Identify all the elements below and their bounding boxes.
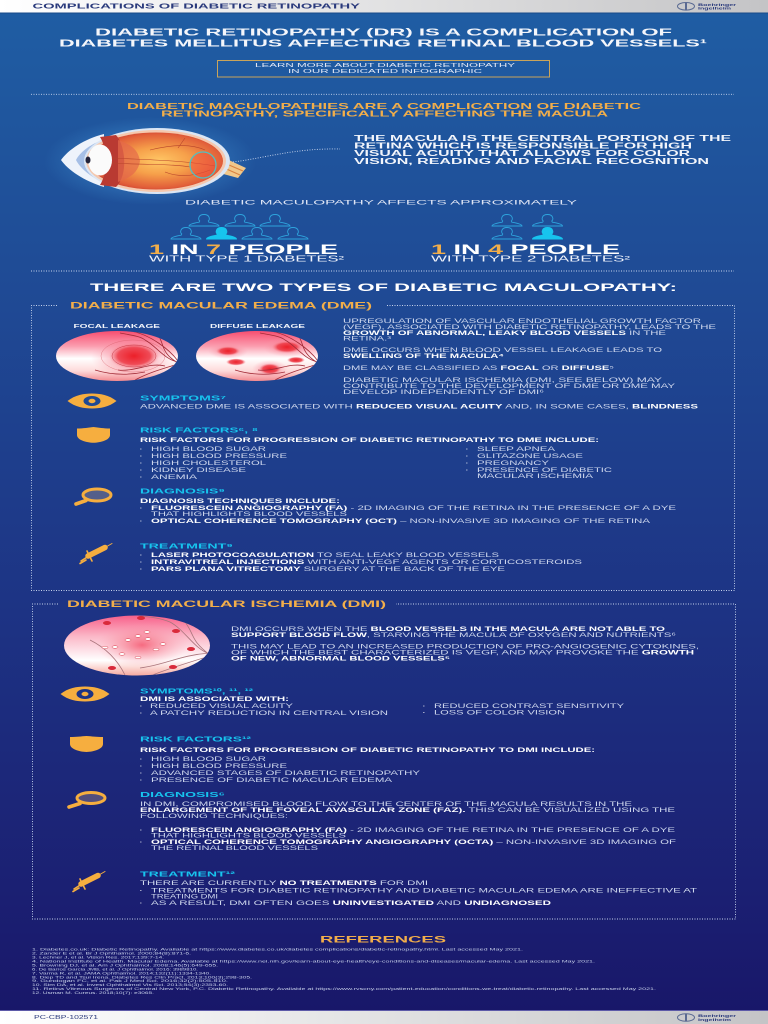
ciliary body xyxy=(100,135,124,187)
references list: 6. De Barros Garcia JMB, et al. J Ophthalmol. 2016: 3989810. xyxy=(32,967,198,971)
references list: 12. Usman M. Cureus. 2018;10(7): e3065. xyxy=(32,991,154,995)
DMI description: DMI OCCURS WHEN THE BLOOD VESSELS IN THE MACULA ARE NOT ABLE TO xyxy=(231,626,665,633)
DME description xyxy=(343,318,716,396)
panel: diabetic macular ischemia xyxy=(32,599,736,919)
diagnosis: · xyxy=(140,827,142,834)
link box: LEARN MORE ABOUT DIABETIC RETINOPATHY xyxy=(255,63,515,69)
DME description: (VEGF), ASSOCIATED WITH DIABETIC RETINOPATHY, LEADS TO THE xyxy=(343,324,716,331)
macula ring xyxy=(190,152,216,178)
icon: shield xyxy=(70,736,103,752)
stat: 1 in 7: 1 IN 7 PEOPLE xyxy=(149,242,338,257)
treatment: · xyxy=(140,552,142,559)
bullet list: right: PREGNANCY xyxy=(477,460,549,467)
diagnosis: FOLLOWING TECHNIQUES: xyxy=(140,813,288,820)
symptoms xyxy=(140,686,624,717)
DMI description xyxy=(231,626,700,663)
macula description: THE MACULA IS THE CENTRAL PORTION OF THE xyxy=(354,134,732,143)
gold subtitle xyxy=(127,102,641,119)
icon: people 1 in 4 xyxy=(492,214,562,239)
treatment: · xyxy=(140,900,142,907)
treatment: TREATMENT⁹ xyxy=(140,542,233,551)
stat: 1 in 4: WITH TYPE 2 DIABETES² xyxy=(431,254,631,264)
symptoms: SYMPTOMS¹⁰, ¹¹, ¹² xyxy=(140,686,254,695)
bullet list: right: · xyxy=(466,460,468,467)
risk factors: PRESENCE OF DIABETIC MACULAR EDEMA xyxy=(151,777,394,784)
DMI description: OF NEW, ABNORMAL BLOOD VESSELS⁵ xyxy=(231,656,450,663)
logo: Boehringer Ingelheim xyxy=(678,1014,737,1022)
icon: magnifier xyxy=(69,792,105,807)
treatment: PARS PLANA VITRECTOMY SURGERY AT THE BACK OF THE EYE xyxy=(151,566,505,573)
treatment: INTRAVITREAL INJECTIONS WITH ANTI-VEGF AGENTS OR CORTICOSTEROIDS xyxy=(151,559,582,566)
retina: focal leakage: FOCAL LEAKAGE xyxy=(74,324,161,330)
icon: syringe xyxy=(80,544,112,564)
link box: IN OUR DEDICATED INFOGRAPHIC xyxy=(288,69,482,75)
link box xyxy=(218,60,550,77)
main title xyxy=(59,28,708,49)
diagnosis: DIAGNOSIS⁹ xyxy=(140,487,225,496)
treatment: TREATING DMI xyxy=(151,894,218,901)
symptoms: SYMPTOMS⁷ xyxy=(140,394,226,403)
DME description: DME MAY BE CLASSIFIED AS FOCAL OR DIFFUSE ⁵ xyxy=(343,365,615,372)
bullet list: left: · xyxy=(140,453,142,460)
stat: 1 in 4 xyxy=(431,242,631,264)
treatment: TREATMENT¹² xyxy=(140,870,236,879)
section heading: THERE ARE TWO TYPES OF DIABETIC MACULOPATHY: xyxy=(90,282,677,294)
treatment: AS A RESULT, DMI OFTEN GOES UNINVESTIGATED AND UNDIAGNOSED xyxy=(151,900,552,907)
diagnosis xyxy=(140,487,676,525)
sclera xyxy=(84,128,230,194)
treatment: · xyxy=(140,559,142,566)
DME description: GROWTH OF ABNORMAL, LEAKY BLOOD VESSELS IN THE xyxy=(343,330,666,337)
bullet list: left: HIGH BLOOD PRESSURE xyxy=(151,453,287,460)
risk factors: · xyxy=(140,770,142,777)
macula description: VISION, READING AND FACIAL RECOGNITION xyxy=(354,157,709,166)
DME description: CONTRIBUTE TO THE DEVELOPMENT OF DME OR DME MAY xyxy=(343,383,675,390)
bullet list: left: · xyxy=(140,446,142,453)
symptoms xyxy=(140,394,698,411)
stat: 1 in 7 xyxy=(149,242,345,264)
bullet list: right: PRESENCE OF DIABETIC xyxy=(477,467,613,474)
diagnosis: IN DMI, COMPROMISED BLOOD FLOW TO THE CENTER OF THE MACULA RESULTS IN THE xyxy=(140,801,632,808)
symptoms: A PATCHY REDUCTION IN CENTRAL VISION xyxy=(150,710,388,717)
bullet list: right: · xyxy=(466,453,468,460)
icon: shield xyxy=(77,427,110,443)
DMI description: THIS MAY LEAD TO AN INCREASED PRODUCTION OF PRO-ANGIOGENIC CYTOKINES, xyxy=(231,644,700,651)
icon: eye xyxy=(68,394,116,408)
risk factors xyxy=(140,735,595,784)
risk factors: HIGH BLOOD SUGAR xyxy=(151,756,267,763)
DME description: DME OCCURS WHEN BLOOD VESSEL LEAKAGE LEADS TO xyxy=(343,347,662,354)
symptoms: · xyxy=(140,710,142,717)
treatment xyxy=(140,870,697,907)
lens xyxy=(88,144,112,176)
main title: DIABETES MELLITUS AFFECTING RETINAL BLOOD VESSELS¹ xyxy=(59,38,708,49)
bullet list: right: SLEEP APNEA xyxy=(477,446,557,453)
risk factors xyxy=(140,426,613,481)
symptoms: · xyxy=(423,703,425,710)
retina: ischemia xyxy=(64,616,210,676)
DMI description: OF WHICH THE BEST CHARACTERIZED IS VEGF, AND MAY PROVOKE THE GROWTH xyxy=(231,650,695,657)
retina: diffuse leakage xyxy=(196,324,318,381)
references list: 3. Lechner J, et al. Vision Res. 2017;139:7-14. xyxy=(32,955,164,959)
symptoms: · xyxy=(140,703,142,710)
diagnosis: DIAGNOSIS⁶ xyxy=(140,790,225,799)
bullet list: left: KIDNEY DISEASE xyxy=(151,467,246,474)
header title: COMPLICATIONS OF DIABETIC RETINOPATHY xyxy=(32,4,361,11)
treatment: · xyxy=(140,566,142,573)
symptoms: ADVANCED DME IS ASSOCIATED WITH REDUCED VISUAL ACUITY AND, IN SOME CASES, BLINDNESS xyxy=(140,404,698,411)
document code: PC-CBP-102571 xyxy=(34,1015,98,1021)
references list: 11. Retina Vitreous Surgeons of Central New York, P.C. Diabetic Retinopathy. Available at https://www.rvscny.com/patient-education/conditions-we-treat/diabetic-retinopathy. Last accessed May 2021. xyxy=(32,987,656,991)
treatment xyxy=(140,542,582,573)
logo: Boehringer Ingelheim xyxy=(678,2,737,11)
bullet list: left: · xyxy=(140,474,142,481)
macula description: RETINA WHICH IS RESPONSIBLE FOR HIGH xyxy=(354,142,692,151)
risk factors: RISK FACTORS⁶, ⁸ xyxy=(140,426,258,435)
bullet list: right xyxy=(466,446,613,480)
diagnosis: OPTICAL COHERENCE TOMOGRAPHY ANGIOGRAPHY (OCTA) – NON-INVASIVE 3D IMAGING OF xyxy=(151,839,676,846)
eye cross-section illustration xyxy=(44,117,256,205)
references list: 10. Sim DA, et al. Invest Ophthalmol Vis Sci. 2013;54(3):2353-60. xyxy=(32,983,228,987)
logo: Boehringer Ingelheim: Boehringer xyxy=(698,1014,737,1018)
risk factors: · xyxy=(140,756,142,763)
bullet list: right: MACULAR ISCHEMIA xyxy=(477,473,595,480)
icon: people 1 in 7 xyxy=(171,214,308,239)
references list: 1. Diabetes.co.uk: Diabetic Retinopathy. Available at https://www.diabetes.co.uk/diabetes complications/diabetic-retinopathy.html. Last accessed May 2021. xyxy=(32,948,523,952)
footer bar xyxy=(0,1010,768,1024)
symptoms: REDUCED VISUAL ACUITY xyxy=(150,703,293,710)
risk factors: RISK FACTORS¹² xyxy=(140,735,252,744)
bullet list: left: · xyxy=(140,460,142,467)
treatment: THERE ARE CURRENTLY NO TREATMENTS FOR DMI xyxy=(140,880,429,887)
retinal vessels xyxy=(112,138,215,176)
risk factors: · xyxy=(140,763,142,770)
main title: DIABETIC RETINOPATHY (DR) IS A COMPLICATION OF xyxy=(95,28,672,39)
bullet list: left: ANEMIA xyxy=(151,474,199,481)
icon: syringe xyxy=(73,872,105,892)
diagnosis: THAT HIGHLIGHTS BLOOD VESSELS xyxy=(151,511,347,518)
references list xyxy=(32,948,656,995)
symptoms: LOSS OF COLOR VISION xyxy=(434,710,565,717)
DME description: DIABETIC MACULAR ISCHEMIA (DMI, SEE BELOW) MAY xyxy=(343,377,662,384)
treatment: LASER PHOTOCOAGULATION TO SEAL LEAKY BLOOD VESSELS xyxy=(151,552,499,559)
bullet list: left xyxy=(140,446,287,481)
gold subtitle: DIABETIC MACULOPATHIES ARE A COMPLICATION OF DIABETIC xyxy=(127,102,641,111)
symptoms: · xyxy=(423,710,425,717)
bullet list: left: HIGH BLOOD SUGAR xyxy=(151,446,267,453)
references list: 2. Zander E et al. Br J Ophthalmol. 2000;84(8):871-6. xyxy=(32,952,191,956)
diagnosis: OPTICAL COHERENCE TOMOGRAPHY (OCT) – NON-INVASIVE 3D IMAGING OF THE RETINA xyxy=(151,518,652,525)
diagnosis: THE RETINAL BLOOD VESSELS xyxy=(151,845,318,852)
diagnosis: FLUORESCEIN ANGIOGRAPHY (FA) - 2D IMAGING OF THE RETINA IN THE PRESENCE OF A DYE xyxy=(151,505,676,512)
panel: diabetic macular edema xyxy=(32,301,734,590)
icon: eye xyxy=(60,686,110,702)
diagnosis: ENLARGEMENT OF THE FOVEAL AVASCULAR ZONE (FAZ). THIS CAN BE VISUALIZED USING THE xyxy=(140,807,675,814)
references list: 7. Varma R, et al. JAMA Ophthalmol. 2014;132(11):1334-1340. xyxy=(32,971,211,975)
optic nerve xyxy=(216,155,246,178)
risk factors: RISK FACTORS FOR PROGRESSION OF DIABETIC RETINOPATHY TO DMI INCLUDE: xyxy=(140,747,595,754)
diagnosis xyxy=(140,790,676,852)
DME description: UPREGULATION OF VASCULAR ENDOTHELIAL GROWTH FACTOR xyxy=(343,318,702,325)
bullet list: right: · xyxy=(466,467,468,474)
icon: magnifier xyxy=(76,489,111,504)
risk factors: · xyxy=(140,777,142,784)
references list: 8. Diep TD and Tsui Irena. Diabetes Res Clin Pract. 2013;100(3):298-305. xyxy=(32,975,252,979)
bullet list: right: GLITAZONE USAGE xyxy=(477,453,583,460)
bullet list: right: · xyxy=(466,446,468,453)
treatment: · xyxy=(140,888,142,895)
gold subtitle: RETINOPATHY, SPECIFICALLY AFFECTING THE MACULA xyxy=(161,110,608,119)
diagnosis: · xyxy=(140,839,142,846)
DME description: RETINA.³ xyxy=(343,336,391,343)
heading: DME: DIABETIC MACULAR EDEMA (DME) xyxy=(70,301,372,311)
diagnosis: DIAGNOSIS TECHNIQUES INCLUDE: xyxy=(140,498,340,505)
diagnosis: THAT HIGHLIGHTS BLOOD VESSELS xyxy=(151,833,346,840)
cornea xyxy=(61,134,104,187)
prevalence intro: DIABETIC MACULOPATHY AFFECTS APPROXIMATELY xyxy=(185,200,578,206)
symptoms: REDUCED CONTRAST SENSITIVITY xyxy=(434,703,624,710)
logo: Boehringer Ingelheim: Ingelheim xyxy=(698,1018,731,1022)
treatment: TREATMENTS FOR DIABETIC RETINOPATHY AND DIABETIC MACULAR EDEMA ARE INEFFECTIVE AT xyxy=(151,888,697,895)
risk factors: ADVANCED STAGES OF DIABETIC RETINOPATHY xyxy=(151,770,420,777)
header bar xyxy=(0,0,768,14)
DMI description: SUPPORT BLOOD FLOW , STARVING THE MACULA OF OXYGEN AND NUTRIENTS⁶ xyxy=(231,632,677,639)
dotted callout line xyxy=(233,149,340,162)
diagnosis: · xyxy=(140,518,142,525)
stat: 1 in 4: 1 IN 4 PEOPLE xyxy=(431,242,620,257)
logo: Boehringer Ingelheim: Ingelheim xyxy=(698,7,731,11)
macula description xyxy=(354,134,732,166)
retina: focal leakage xyxy=(56,324,178,381)
DME description: SWELLING OF THE MACULA⁴ xyxy=(343,353,504,360)
references heading: REFERENCES xyxy=(320,935,446,945)
bullet list: left: · xyxy=(140,467,142,474)
references list: 9. Gundogan FC, et al. Pak J Med Sci. 2016;32(2):505-510. xyxy=(32,979,228,983)
macula description: VISUAL ACUITY THAT ALLOWS FOR COLOR xyxy=(354,149,690,158)
bullet list: left: HIGH CHOLESTEROL xyxy=(151,460,267,467)
references list: 4. National Institute of Health. Macular Edema. Available at https://www.nei.nih.gov/learn-about-eye-health/eye-conditions-and-diseases/macular-edema. Last accessed May 2021. xyxy=(32,959,595,963)
risk factors: HIGH BLOOD PRESSURE xyxy=(151,763,287,770)
logo: Boehringer Ingelheim: Boehringer xyxy=(698,3,737,7)
DME description: DEVELOP INDEPENDENTLY OF DMI⁶ xyxy=(343,389,545,396)
references list: 5. Browning DJ, et al. Am J Ophthalmol. 2008;146(5):649-655. xyxy=(32,963,218,967)
diagnosis: FLUORESCEIN ANGIOGRAPHY (FA) - 2D IMAGING OF THE RETINA IN THE PRESENCE OF A DYE xyxy=(151,827,675,834)
diagnosis: · xyxy=(140,505,142,512)
symptoms: DMI IS ASSOCIATED WITH: xyxy=(140,696,289,703)
heading: DMI: DIABETIC MACULAR ISCHEMIA (DMI) xyxy=(67,599,386,609)
retina: diffuse leakage: DIFFUSE LEAKAGE xyxy=(210,324,306,330)
risk factors: RISK FACTORS FOR PROGRESSION OF DIABETIC RETINOPATHY TO DME INCLUDE: xyxy=(140,437,599,444)
stat: 1 in 7: WITH TYPE 1 DIABETES² xyxy=(149,254,345,264)
